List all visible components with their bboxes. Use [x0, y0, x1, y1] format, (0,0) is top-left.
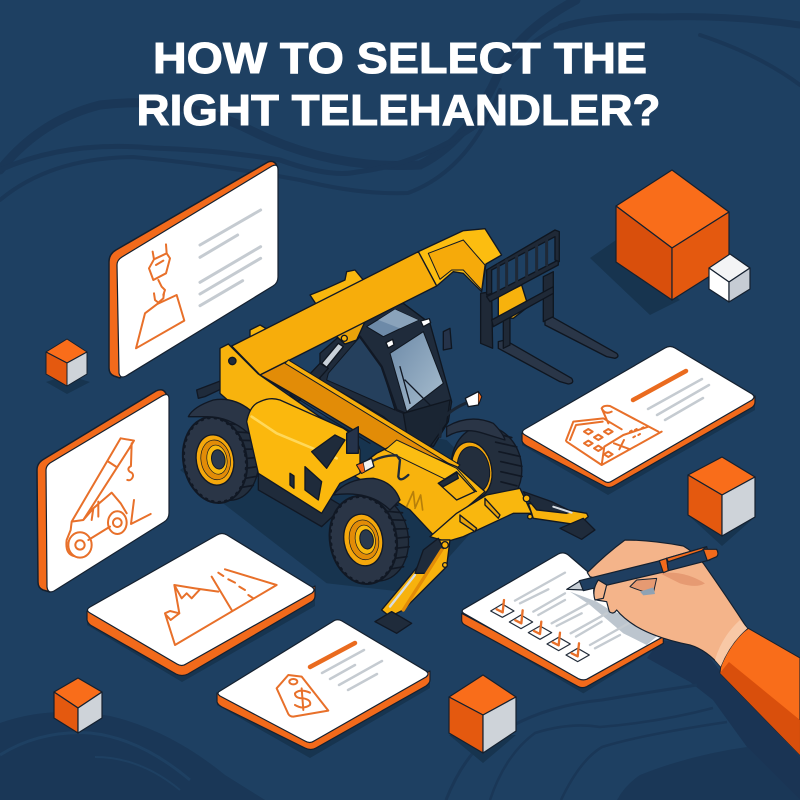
rear left wheel	[176, 410, 266, 508]
text lines: job site	[633, 371, 686, 400]
panel: lifting capacity card	[109, 161, 278, 378]
lift cylinder	[290, 322, 365, 402]
telehandler machine	[176, 229, 618, 633]
checklist boxes and check marks	[491, 600, 589, 662]
thumb	[594, 580, 607, 600]
text lines: budget	[310, 643, 355, 667]
front left wheel	[323, 488, 416, 589]
stabilizers	[375, 488, 595, 633]
panel: checklist card	[462, 553, 663, 693]
panel: terrain card	[87, 534, 315, 682]
sleeve	[720, 628, 800, 755]
front chassis arm	[350, 440, 485, 535]
text lines: capacity	[200, 210, 261, 306]
hand writing with pen	[567, 540, 800, 755]
cube: small white	[709, 254, 750, 302]
cube: large orange	[590, 170, 729, 315]
pen	[567, 547, 718, 591]
cube: right middle	[688, 457, 755, 546]
panel: budget card	[217, 620, 430, 758]
panel: job site card	[522, 346, 755, 495]
hand	[587, 540, 747, 667]
cube: bottom centre	[449, 675, 516, 763]
title: HOW TO SELECT THE	[153, 35, 647, 83]
cab	[320, 303, 482, 447]
icon: crane hook with load	[136, 244, 184, 348]
icon: mountains and road	[165, 569, 277, 645]
panel: reach and height card	[37, 390, 169, 592]
shadow of hand on card	[570, 592, 657, 645]
engine hood	[247, 399, 374, 527]
title: RIGHT TELEHANDLER?	[136, 87, 660, 135]
cube: bottom left	[54, 678, 102, 733]
icon: site plan and blueprint	[566, 406, 662, 465]
rear right wheel	[445, 420, 528, 515]
icon: price tag	[277, 675, 328, 717]
icon: telehandler outline	[66, 438, 151, 558]
forks and carriage	[481, 230, 618, 384]
boom	[232, 229, 502, 375]
rear tower and chassis	[197, 344, 460, 483]
cube: left small	[46, 339, 90, 394]
title	[136, 35, 660, 135]
text lines: checklist	[515, 573, 633, 648]
